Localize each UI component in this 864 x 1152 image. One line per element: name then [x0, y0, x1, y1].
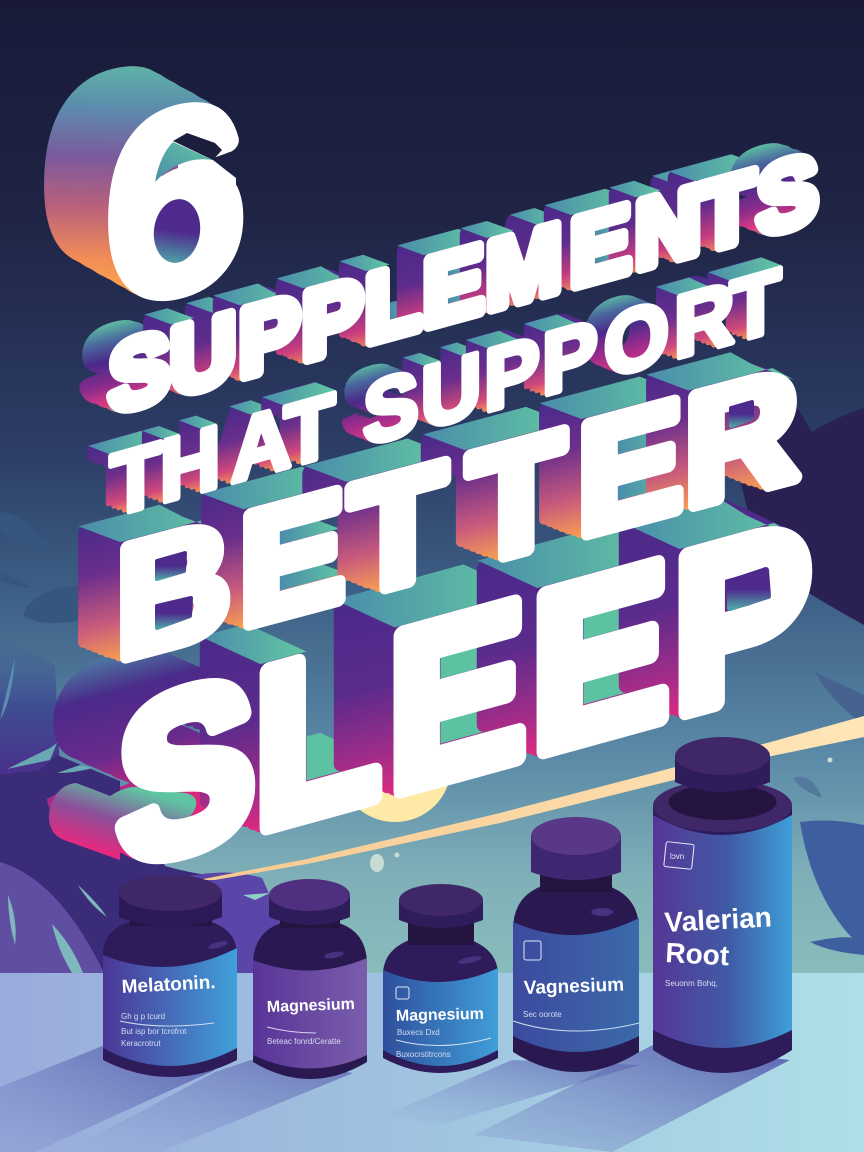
title — [40, 1, 818, 929]
extrusion: SUPPLEMENTS — [82, 119, 812, 439]
extrusion: SLEEP: S — [87, 612, 225, 902]
extrusion: THAT SUPPORT: A — [210, 378, 270, 494]
extrusion: SUPPLEMENTS: P — [218, 267, 279, 391]
numeral 6: 6 — [109, 50, 242, 355]
extrusion: THAT SUPPORT: H — [145, 401, 205, 516]
extrusion: SLEEP: L — [208, 570, 334, 857]
extrusion: BETTER: T — [308, 413, 404, 616]
cap — [531, 836, 621, 880]
extrusion: SUPPLEMENTS: U — [164, 291, 230, 416]
extrusion: THAT SUPPORT: P — [479, 315, 535, 429]
extrusion: SUPPLEMENTS: S — [82, 301, 143, 425]
extrusion: BETTER: T — [344, 426, 440, 629]
extrusion: THAT SUPPORT: O — [594, 277, 659, 393]
extrusion: BETTER: E — [542, 352, 647, 557]
label text: Vagnesium — [523, 975, 624, 999]
extrusion: numeral 6: 6 — [45, 14, 178, 319]
extrusion: SLEEP: S — [94, 616, 232, 906]
extrusion: SUPPLEMENTS: P — [212, 266, 273, 389]
extrusion: SUPPLEMENTS: N — [625, 162, 690, 287]
extrusion: THAT SUPPORT: U — [406, 327, 466, 443]
extrusion: SLEEP: E — [485, 491, 623, 781]
extrusion: SLEEP: E — [375, 546, 513, 836]
extrusion: THAT SUPPORT: P — [532, 297, 587, 411]
extrusion: THAT SUPPORT: S — [348, 345, 404, 459]
extrusion: SUPPLEMENTS: S — [103, 309, 164, 433]
extrusion: THAT SUPPORT: O — [583, 272, 648, 389]
extrusion: SUPPLEMENTS: T — [683, 146, 739, 268]
label — [103, 948, 237, 1066]
extrusion: THAT SUPPORT: T — [709, 241, 760, 354]
neck — [408, 915, 474, 945]
icon: label badge: lɔvn — [670, 852, 684, 861]
background leaf: right dark — [740, 385, 864, 625]
extrusion: THAT SUPPORT: P — [527, 295, 583, 409]
extrusion: THAT SUPPORT: T — [720, 245, 771, 358]
extrusion: numeral 6: 6 — [102, 46, 235, 352]
counters of B — [157, 553, 191, 628]
extrusion: BETTER: E — [566, 361, 671, 566]
extrusion: BETTER: T — [456, 392, 553, 595]
extrusion: THAT SUPPORT: H — [150, 402, 210, 518]
floor — [0, 973, 864, 1152]
extrusion: SUPPLEMENTS: E — [396, 215, 457, 339]
icon: label badge — [664, 842, 694, 869]
extrusion: SLEEP: P — [660, 468, 798, 757]
extrusion: SUPPLEMENTS: E — [543, 175, 604, 299]
extrusion: SUPPLEMENTS: N — [619, 160, 685, 285]
extrusion: SUPPLEMENTS: N — [629, 164, 695, 289]
extrusion: THAT SUPPORT: A — [216, 381, 276, 496]
extrusion: lower hook of S — [49, 783, 196, 860]
label — [253, 958, 367, 1068]
extrusion: SLEEP — [49, 425, 806, 929]
extrusion: BETTER: T — [314, 415, 410, 618]
extrusion: SUPPLEMENTS: U — [154, 287, 220, 412]
extrusion: THAT SUPPORT — [88, 235, 782, 539]
extrusion: SUPPLEMENTS: N — [614, 158, 680, 282]
extrusion: SUPPLEMENTS: N — [608, 156, 674, 281]
bottle body — [653, 790, 792, 1073]
bottle: Vagnesium — [513, 817, 639, 1072]
extrusion: SLEEP: L — [227, 580, 354, 866]
extrusion: THAT SUPPORT: S — [342, 343, 398, 457]
highlight — [324, 950, 344, 960]
icon: label badge — [396, 987, 409, 999]
extrusion: THAT SUPPORT: P — [463, 309, 519, 423]
extrusion: SUPPLEMENTS: P — [223, 270, 284, 393]
extrusion: SLEEP: E — [498, 497, 636, 787]
extrusion: BETTER: T — [450, 391, 547, 594]
word: SLEEP: SLEEP — [117, 473, 811, 916]
extrusion: SUPPLEMENTS: L — [355, 238, 410, 360]
notch of 6 — [173, 133, 222, 160]
extrusion: SLEEP: P — [646, 461, 784, 751]
extrusion: BETTER: T — [332, 423, 428, 625]
extrusion: numeral 6: 6 — [70, 28, 203, 334]
bottle: Valerian Root: Seuonm Bohq, — [665, 979, 718, 988]
background leaves: right blue — [793, 672, 864, 955]
extrusion: SUPPLEMENTS: E — [407, 220, 468, 343]
extrusion: BETTER: E — [216, 447, 321, 652]
extrusion: SLEEP: E — [335, 527, 473, 817]
highlight — [208, 940, 228, 950]
extrusion: BETTER: E — [234, 453, 339, 658]
extrusion: SUPPLEMENTS: P — [292, 254, 352, 377]
counter of P — [730, 570, 768, 608]
extrusion: THAT SUPPORT: R — [664, 258, 724, 374]
label text: Melatonin. — [121, 972, 216, 998]
bottle body — [513, 885, 639, 1072]
extrusion: BETTER: B — [98, 480, 213, 687]
extrusion: THAT SUPPORT: T — [715, 244, 766, 356]
extrusion: SUPPLEMENTS: P — [229, 271, 289, 395]
extrusion: SUPPLEMENTS: S — [730, 124, 791, 248]
extrusion: SUPPLEMENTS: T — [693, 150, 749, 272]
extrusion: BETTER: B — [74, 470, 189, 678]
extrusion: SLEEP: S — [102, 619, 240, 909]
extrusion: SUPPLEMENTS: M — [459, 194, 535, 322]
extrusion: BETTER: E — [554, 357, 659, 562]
extrusion: SLEEP: L — [201, 567, 327, 854]
extrusion: THAT SUPPORT: T — [263, 366, 314, 479]
extrusion: SLEEP: P — [633, 455, 772, 745]
cap — [675, 756, 770, 792]
neck — [280, 912, 340, 928]
extrusion: SUPPLEMENTS: E — [564, 184, 625, 307]
extrusion: SUPPLEMENTS: U — [160, 289, 225, 414]
extrusion: SUPPLEMENTS: E — [402, 217, 463, 340]
bottle body — [103, 920, 237, 1077]
counter of 6 — [150, 196, 204, 266]
background leaves: left faint — [0, 512, 80, 623]
extrusion: SLEEP: E — [471, 485, 609, 774]
extrusion: BETTER: E — [198, 440, 303, 645]
extrusion: THAT SUPPORT: T — [274, 370, 325, 483]
extrusion: numeral 6: 6 — [90, 39, 223, 344]
shoulder ring — [653, 780, 792, 832]
extrusion: SLEEP: P — [613, 446, 751, 735]
extrusion: numeral 6: 6 — [52, 18, 185, 323]
extrusion: SUPPLEMENTS: E — [560, 181, 620, 304]
extrusion: THAT SUPPORT: P — [537, 299, 593, 413]
highlight — [458, 955, 482, 965]
bottle: Melatonin: Gh g p tcurd — [121, 1012, 165, 1021]
extrusion: THAT SUPPORT: R — [669, 261, 730, 376]
extrusion: THAT SUPPORT: U — [416, 332, 477, 447]
extrusion: BETTER: T — [444, 388, 541, 591]
leaf streak behind S — [57, 765, 93, 773]
extrusion: SLEEP: E — [361, 540, 499, 830]
label — [513, 918, 639, 1052]
extrusion: BETTER: T — [432, 384, 529, 586]
extrusion: SUPPLEMENTS: S — [93, 305, 154, 429]
extrusion: BETTER: E — [560, 359, 665, 564]
extrusion: SUPPLEMENTS: L — [359, 241, 415, 363]
extrusion: SLEEP: E — [368, 543, 506, 833]
extrusion: SUPPLEMENTS: M — [476, 200, 552, 327]
extrusion: SUPPLEMENTS: E — [549, 177, 610, 300]
extrusion: BETTER: T — [462, 395, 559, 597]
extrusion: SLEEP: L — [214, 573, 341, 860]
extrusion: SLEEP: S — [71, 606, 209, 895]
extrusion: BETTER: R — [666, 328, 781, 536]
extrusion: SLEEP: P — [653, 465, 791, 754]
extrusion: SLEEP: L — [248, 588, 374, 875]
bottle: Melatonin: But isp bor tcrofrot — [121, 1027, 187, 1036]
extrusion: THAT SUPPORT: P — [521, 292, 577, 407]
extrusion: SLEEP: E — [355, 537, 493, 826]
extrusion: numeral 6: 6 — [96, 43, 230, 348]
extrusion: BETTER: B — [80, 473, 195, 680]
wedge of 6 — [155, 142, 213, 182]
icon: label badge — [524, 941, 541, 960]
extrusion: THAT SUPPORT: H — [139, 398, 199, 514]
extrusion: SUPPLEMENTS: M — [465, 196, 541, 323]
extrusion: numeral 6: 6 — [77, 32, 210, 337]
floating dots — [370, 758, 832, 872]
extrusion: SLEEP: S — [56, 599, 194, 888]
extrusion: SLEEP: E — [491, 494, 630, 784]
bottle: Melatonin: Keracrotrut — [121, 1039, 161, 1048]
extrusion: BETTER: E — [228, 451, 333, 656]
bottle: Vagnesium: Sec oorote — [523, 1010, 562, 1019]
extrusion: THAT SUPPORT: T — [100, 419, 151, 532]
extrusion: SUPPLEMENTS: M — [480, 202, 556, 330]
extrusion: THAT SUPPORT: P — [469, 311, 525, 425]
cap — [269, 895, 350, 925]
extrusion: SUPPLEMENTS: P — [281, 250, 342, 373]
extrusion: SUPPLEMENTS: U — [149, 285, 215, 409]
extrusion: BETTER: R — [679, 332, 793, 540]
extrusion: SLEEP: P — [640, 458, 778, 748]
extrusion: THAT SUPPORT: R — [659, 257, 719, 372]
extrusion: THAT SUPPORT: T — [89, 415, 140, 528]
extrusion: THAT SUPPORT: S — [358, 349, 414, 463]
extrusion: THAT SUPPORT: T — [279, 372, 330, 485]
extrusion: BETTER — [74, 309, 794, 701]
extrusion: SUPPLEMENTS: S — [751, 133, 812, 256]
extrusion: SUPPLEMENTS: P — [275, 248, 336, 372]
extrusion: SUPPLEMENTS: T — [672, 141, 728, 263]
neck — [540, 868, 612, 892]
extrusion: BETTER: R — [673, 330, 787, 537]
extrusion: BETTER: B — [93, 478, 207, 685]
extrusion: BETTER: T — [438, 386, 535, 589]
extrusion: SUPPLEMENTS: M — [470, 198, 546, 326]
word: BETTER: BETTER — [116, 335, 799, 694]
extrusion: SUPPLEMENTS: E — [413, 221, 473, 344]
extrusion: SUPPLEMENTS: S — [99, 307, 159, 430]
label — [653, 815, 792, 1048]
bottle: Valerian Root — [653, 737, 792, 1073]
extrusion: THAT SUPPORT: T — [105, 421, 156, 534]
extrusion: BETTER: T — [338, 424, 434, 627]
bottle: Magnesium blue: Buxocrstitrcons — [396, 1050, 451, 1059]
extrusion: SUPPLEMENTS: U — [143, 283, 209, 408]
extrusion: SLEEP: P — [620, 449, 758, 738]
bottle: Magnesium purple: Beteac fonrd/Ceratte — [267, 1037, 341, 1046]
extrusion: BETTER: R — [648, 321, 763, 529]
extrusion: SLEEP: P — [667, 470, 805, 760]
bottle: Magnesium purple — [253, 879, 367, 1079]
extrusion: THAT SUPPORT: O — [589, 275, 654, 392]
highlight — [591, 908, 613, 916]
label text: Magnesium — [267, 996, 355, 1016]
extrusion: BETTER: B — [111, 484, 225, 691]
extrusion: BETTER: E — [204, 442, 309, 647]
bottle body — [383, 938, 498, 1073]
extrusion: SUPPLEMENTS: L — [344, 234, 400, 356]
extrusion: SUPPLEMENTS: S — [747, 130, 807, 253]
extrusion: SLEEP: S — [64, 603, 202, 892]
label text: Magnesium — [396, 1006, 484, 1025]
extrusion: BETTER: T — [326, 420, 422, 623]
extrusion: SUPPLEMENTS: L — [349, 237, 405, 359]
extrusion: SLEEP: E — [382, 548, 520, 838]
extrusion: numeral 6: 6 — [84, 35, 217, 341]
extrusion: SUPPLEMENTS: T — [689, 147, 744, 269]
extrusion: SUPPLEMENTS: S — [736, 126, 797, 249]
gap between S bulge and hook — [40, 755, 120, 800]
extrusion: BETTER: E — [572, 363, 677, 568]
extrusion: THAT SUPPORT: U — [400, 325, 460, 441]
extrusion: numeral 6: 6 — [64, 25, 198, 330]
extrusion: SUPPLEMENTS: S — [741, 128, 802, 252]
bottle: Magnesium blue — [383, 884, 498, 1073]
extrusion: SUPPLEMENTS: E — [554, 179, 615, 303]
extrusion: BETTER: E — [210, 445, 315, 650]
word: SUPPLEMENTS: SUPPLEMENTS — [109, 134, 818, 434]
neck — [130, 910, 212, 926]
cap — [399, 900, 483, 928]
extrusion: SLEEP: S — [49, 596, 187, 885]
extrusion: THAT SUPPORT: A — [226, 385, 287, 500]
bottle: Magnesium blue: Buxecs Dxd — [397, 1028, 440, 1037]
light beam — [198, 716, 864, 880]
extrusion: THAT SUPPORT: H — [155, 405, 216, 520]
extrusion: SUPPLEMENTS: P — [233, 274, 294, 397]
bottle: Valerian Root: Root — [665, 937, 730, 971]
extrusion: THAT SUPPORT: T — [95, 417, 146, 530]
extrusion: SLEEP: L — [241, 586, 368, 873]
sun — [339, 712, 451, 822]
extrusion: SLEEP: P — [627, 452, 765, 741]
extrusion: THAT SUPPORT: S — [353, 347, 408, 461]
extrusion: SLEEP: S — [110, 623, 248, 913]
extrusion: SLEEP: E — [525, 509, 663, 799]
extrusion: SLEEP: E — [511, 504, 649, 793]
floor shadows — [0, 1045, 790, 1152]
label text: Valerian — [664, 901, 773, 938]
extrusion: numeral 6: 6 — [58, 21, 191, 327]
counter of R — [731, 402, 752, 426]
extrusion: BETTER: E — [222, 450, 327, 655]
words: THAT SUPPORT: THAT SUPPORT — [110, 249, 781, 536]
extrusion: SUPPLEMENTS: L — [338, 233, 394, 355]
extrusion: BETTER: E — [548, 354, 653, 560]
extrusion: SLEEP: E — [348, 533, 487, 823]
label — [383, 968, 498, 1066]
extrusion: SUPPLEMENTS: E — [417, 224, 478, 347]
extrusion: SUPPLEMENTS: P — [296, 257, 357, 380]
extrusion: THAT SUPPORT: T — [269, 368, 320, 481]
extrusion: THAT SUPPORT: R — [653, 254, 713, 370]
extrusion: BETTER: R — [642, 319, 757, 526]
extrusion: BETTER: R — [661, 326, 775, 533]
extrusion: numeral 6 — [45, 1, 235, 364]
extrusion: SLEEP: L — [234, 583, 360, 870]
extrusion: SLEEP: S — [79, 609, 217, 899]
extrusion: SLEEP: E — [518, 507, 656, 796]
white letter fronts — [109, 50, 818, 916]
extrusion: THAT SUPPORT: T — [725, 248, 776, 361]
extrusion: SLEEP: L — [194, 564, 321, 850]
extrusion: SUPPLEMENTS: T — [678, 143, 734, 265]
extrusion: BETTER: T — [426, 381, 523, 584]
extrusion: BETTER: R — [654, 324, 769, 531]
extrusion: BETTER: E — [536, 350, 641, 555]
extrusion: BETTER: B — [86, 475, 201, 683]
extrusion: SLEEP: E — [504, 501, 642, 790]
extrusion: SUPPLEMENTS: P — [286, 253, 347, 376]
extrusion: SLEEP: E — [478, 488, 616, 778]
extrusion: BETTER: B — [105, 481, 219, 689]
extrusion: SUPPLEMENTS: S — [88, 303, 149, 426]
extrusion: SLEEP: E — [328, 524, 466, 814]
cap — [119, 893, 222, 927]
bottle body — [253, 922, 367, 1079]
bottle: Melatonin — [103, 875, 237, 1077]
extrusion: THAT SUPPORT: A — [221, 382, 281, 498]
extrusion: BETTER: T — [320, 418, 416, 620]
extrusion: SLEEP: E — [342, 530, 480, 820]
extrusion: THAT SUPPORT: P — [474, 313, 529, 427]
letter counters and notches — [150, 133, 768, 628]
extrusion: SLEEP: L — [221, 577, 347, 863]
extrusion: THAT SUPPORT: O — [599, 279, 664, 396]
notch patch of 6 — [178, 158, 236, 192]
extrusion: THAT SUPPORT: U — [411, 329, 471, 445]
background leaves: purple lower left — [0, 640, 305, 975]
